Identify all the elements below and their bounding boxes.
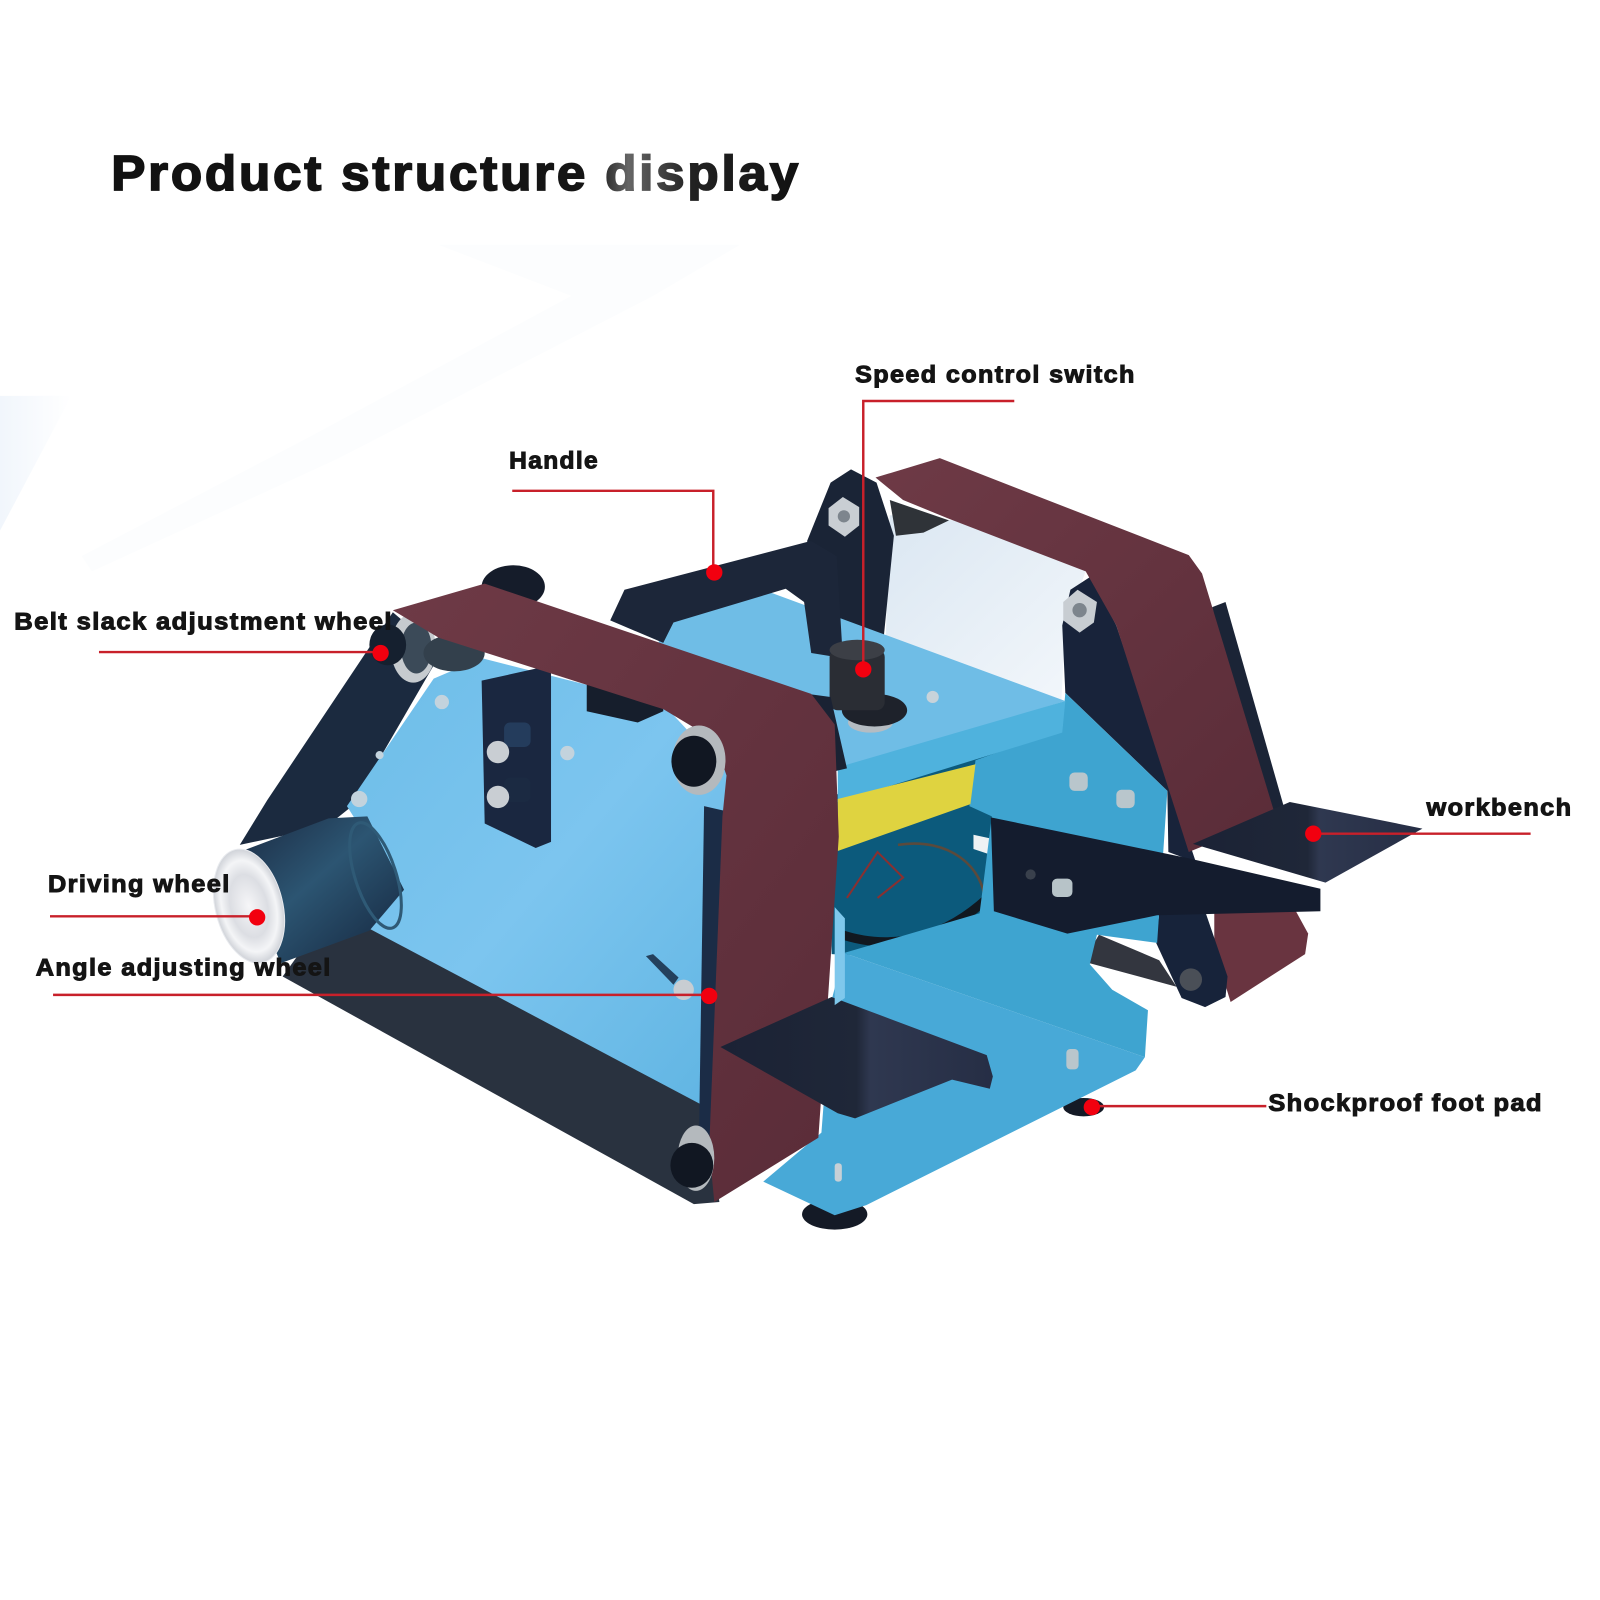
- bottom belt: [283, 927, 719, 1204]
- right workbench arm: [991, 817, 1320, 934]
- callout: shockproof foot pad: [1084, 1090, 1543, 1117]
- rear upper pulley arm: [807, 469, 894, 638]
- callout: angle adjusting wheel: Angle adjusting wheel: [36, 955, 332, 982]
- rear lower belt: [1090, 935, 1177, 987]
- bracket bolts: [487, 722, 531, 808]
- black bolt upper: [671, 726, 726, 795]
- callout: driving wheel: [48, 871, 265, 926]
- callout: handle: [509, 447, 722, 581]
- rear lower belt loop: [1214, 911, 1308, 1002]
- callout: workbench: workbench: [1425, 794, 1572, 821]
- callout: speed control switch: Speed control switch: [855, 362, 1136, 389]
- foot pad front: [802, 1199, 867, 1230]
- rear window panel: [886, 515, 1086, 704]
- front workbench: [720, 997, 993, 1118]
- panel bracket: [482, 665, 551, 848]
- rear black guard plate: [1212, 602, 1284, 813]
- top plate front face: [838, 701, 1065, 802]
- black bolt belt slack: [369, 624, 406, 665]
- callout: belt slack adjustment wheel: Belt slack adjustment wheel: [14, 609, 393, 636]
- rear right black plate: [1062, 577, 1196, 862]
- front blue panel: [347, 658, 730, 1112]
- base floor: [763, 953, 1145, 1215]
- hex bolt on rear arm: [829, 497, 859, 537]
- callout: speed control switch: [855, 362, 1136, 678]
- top plate: [653, 589, 1065, 776]
- white connector: [973, 835, 992, 855]
- rear pulley disc: [482, 565, 545, 608]
- front band black strip: [699, 806, 727, 1153]
- side wall studs: [1066, 772, 1135, 1069]
- black chunk beneath belt: [587, 679, 663, 722]
- hex bolt on rear plate: [1063, 590, 1097, 633]
- rear lower screw: [1180, 968, 1202, 991]
- motor cable and wires: [839, 844, 988, 942]
- angle slot and screw: [646, 954, 694, 1000]
- callout: shockproof foot pad: Shockproof foot pad: [1268, 1090, 1543, 1117]
- callout: handle: Handle: [509, 447, 599, 474]
- cone bearing ring: [339, 817, 412, 934]
- title: Product structure display: [111, 147, 801, 201]
- small bracket behind band: [800, 693, 847, 776]
- background haze: [0, 245, 740, 571]
- callout: angle adjusting wheel: [36, 955, 717, 1004]
- rear lower black plate: [1156, 911, 1228, 1007]
- foot pad rear: [1063, 1098, 1104, 1116]
- left black belt: [240, 612, 441, 845]
- knob base: [842, 694, 907, 733]
- front sanding belt: [393, 584, 839, 1202]
- rear spring coil: [890, 500, 949, 536]
- driving wheel face: [202, 842, 296, 971]
- black bolt lower: [670, 1126, 714, 1191]
- motor cavity: [832, 740, 1041, 959]
- lower side strip: [835, 907, 845, 1005]
- panel screws: [351, 695, 574, 807]
- front bearing: [391, 613, 485, 683]
- speed control knob: [830, 640, 885, 710]
- handle: [610, 541, 843, 658]
- yellow module: [838, 764, 976, 851]
- side wall inside: [844, 693, 1167, 1057]
- plate screw: [927, 691, 939, 703]
- base screw: [835, 1163, 842, 1182]
- driving wheel cone: [237, 816, 404, 963]
- callout: belt slack adjustment wheel: [14, 609, 393, 661]
- callout: driving wheel: Driving wheel: [48, 871, 231, 898]
- belt grinder machine: [202, 458, 1422, 1230]
- rear sanding belt: [876, 458, 1276, 852]
- callout: workbench: [1305, 794, 1572, 842]
- right workbench plate: [1193, 802, 1422, 883]
- arm stud: [1026, 869, 1072, 897]
